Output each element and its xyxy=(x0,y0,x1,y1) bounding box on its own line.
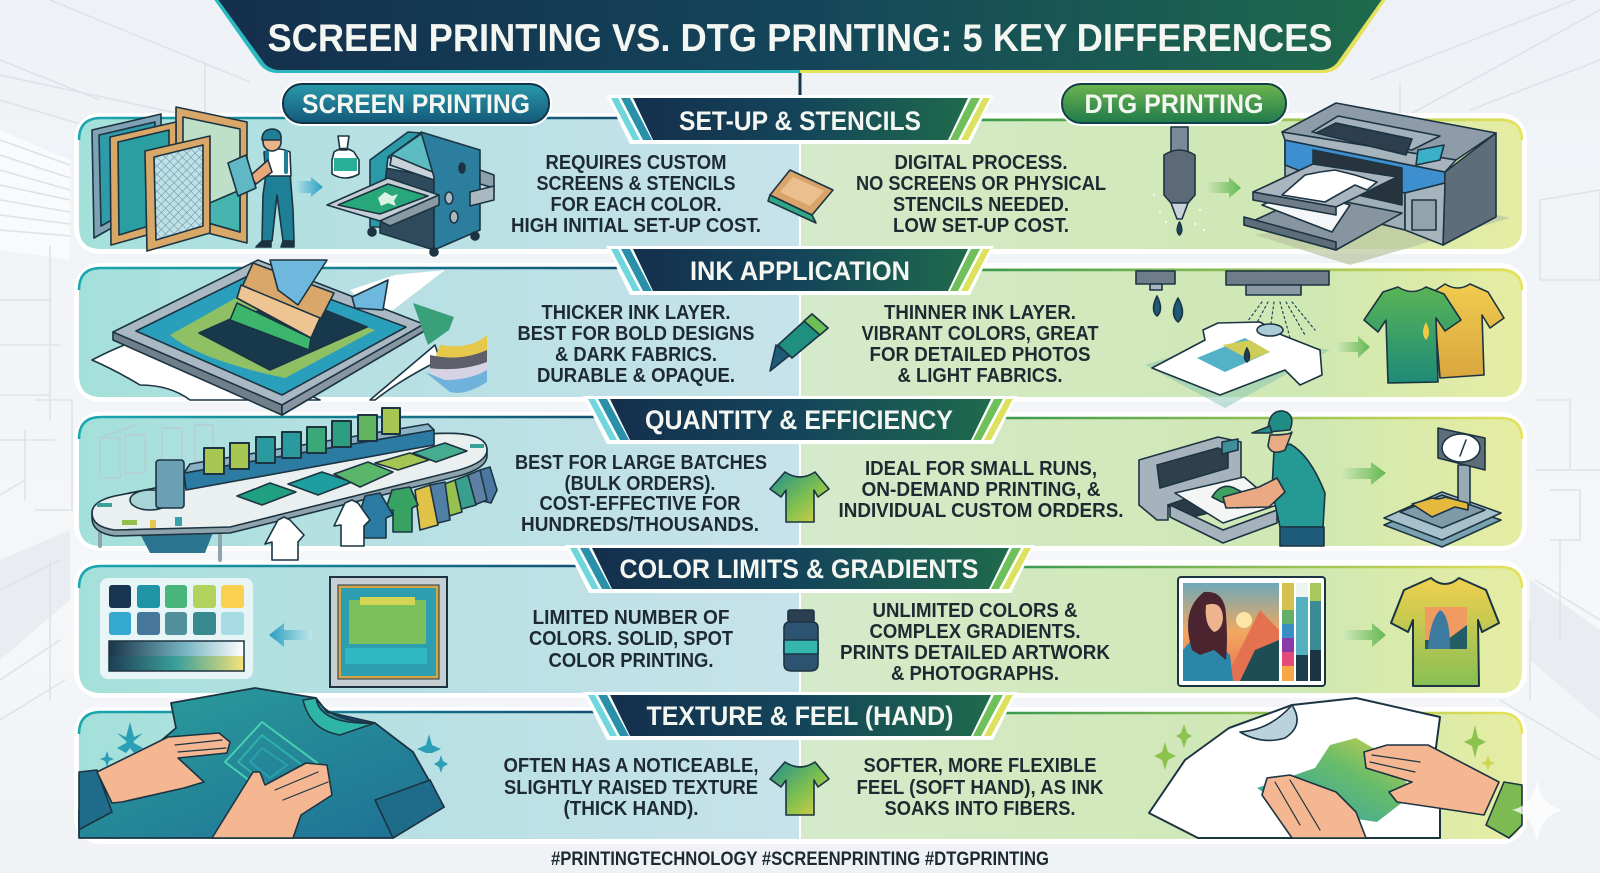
text: dtg texture: SOFTER, MORE FLEXIBLE xyxy=(864,754,1096,777)
text: dtg quantity xyxy=(838,457,1124,522)
text: dtg set-up xyxy=(856,151,1106,237)
gradient strip xyxy=(109,641,244,671)
panel: color limits row xyxy=(74,560,1527,698)
pill: screen printing: SCREEN PRINTING xyxy=(302,89,530,119)
icon: dtg printer xyxy=(1244,103,1510,265)
icon: screen printing press xyxy=(327,132,494,256)
text: dtg ink: THINNER INK LAYER. xyxy=(884,301,1076,324)
text: screen printing ink xyxy=(518,301,754,387)
text: screen printing ink: DURABLE & OPAQUE. xyxy=(537,364,735,387)
text: dtg set-up: NO SCREENS OR PHYSICAL xyxy=(856,172,1106,195)
ribbon: texture and feel xyxy=(583,692,1017,740)
arrow: screens to press xyxy=(294,177,323,197)
pill: screen printing xyxy=(280,81,552,126)
icon: gradient shirt row 5 xyxy=(770,762,829,815)
pill: dtg printing: DTG PRINTING xyxy=(1084,89,1264,119)
text: screen printing ink: THICKER INK LAYER. xyxy=(542,301,730,324)
panel: quantity and efficiency row xyxy=(74,412,1527,551)
ribbon: texture and feel: TEXTURE & FEEL (HAND) xyxy=(646,701,954,731)
icon: weighing scale xyxy=(1384,428,1501,547)
ribbon: color limits and gradients: COLOR LIMITS & GRADIENTS xyxy=(620,554,978,584)
panel: left half row 1 xyxy=(79,118,799,249)
text: screen printing ink: BEST FOR BOLD DESIGNS xyxy=(518,322,754,345)
icon: squeegee xyxy=(768,170,833,223)
icon: white shirt being printed xyxy=(1145,322,1330,408)
text: screen printing quantity: (BULK ORDERS). xyxy=(564,472,716,495)
text: dtg color: COMPLEX GRADIENTS. xyxy=(870,620,1080,643)
panel: ink application row xyxy=(74,263,1527,402)
arrow: screen to palette xyxy=(269,623,312,647)
icon: dtg print nozzle xyxy=(1153,127,1205,235)
text: screen printing ink: & DARK FABRICS. xyxy=(555,343,717,366)
icon: dtg printer with operator xyxy=(1139,437,1277,543)
text: screen printing set-up: FOR EACH COLOR. xyxy=(550,193,722,216)
arrow: printer to scale xyxy=(1341,462,1386,485)
text: dtg ink: FOR DETAILED PHOTOS xyxy=(870,343,1090,366)
icon: framed spot color screen xyxy=(330,577,447,687)
icon: operator at dtg printer xyxy=(1223,411,1325,546)
icon: ink bottle xyxy=(784,610,818,671)
icons: sparkles right xyxy=(1154,724,1495,771)
icon: worker holding a screen xyxy=(228,129,294,247)
ribbon: ink application: INK APPLICATION xyxy=(690,256,910,286)
text: dtg color: & PHOTOGRAPHS. xyxy=(891,662,1059,685)
ribbon: color limits and gradients xyxy=(565,545,1035,593)
text: screen printing texture xyxy=(504,754,758,820)
text: dtg texture: FEEL (SOFT HAND), AS INK xyxy=(856,776,1104,799)
text: dtg texture: SOAKS INTO FIBERS. xyxy=(884,797,1076,820)
text: dtg ink: VIBRANT COLORS, GREAT xyxy=(862,322,1099,345)
text: dtg quantity: ON-DEMAND PRINTING, & xyxy=(862,478,1101,501)
swatches second row xyxy=(109,612,244,635)
text: screen printing color: LIMITED NUMBER OF xyxy=(532,606,730,629)
text: dtg color xyxy=(840,599,1110,685)
decorative sparkle mark xyxy=(1512,780,1562,842)
icon: dtg nozzles and droplets xyxy=(1136,271,1329,345)
icon: ink dropper pen xyxy=(770,314,828,371)
icon: ink bottle xyxy=(332,136,359,178)
portrait figure xyxy=(1183,592,1233,681)
text: screen printing color: COLOR PRINTING. xyxy=(548,649,714,672)
ribbon: quantity and efficiency: QUANTITY & EFFICIENCY xyxy=(645,405,953,435)
footer hashtags: #PRINTINGTECHNOLOGY #SCREENPRINTING #DTGPRINTING xyxy=(551,849,1049,870)
panel: right half row 1 xyxy=(801,118,1522,249)
icon: gradient shirt row 3 xyxy=(770,472,829,522)
text: screen printing quantity: COST-EFFECTIVE FOR xyxy=(540,492,741,515)
ribbon: set-up and stencils xyxy=(606,95,994,144)
ribbon: ink application xyxy=(606,246,994,295)
ribbon: set-up and stencils: SET-UP & STENCILS xyxy=(679,106,921,136)
icon: stack of screens xyxy=(92,107,247,251)
text: screen printing color: COLORS. SOLID, SPOT xyxy=(529,627,733,650)
text: screen printing set-up xyxy=(511,151,761,237)
text: dtg ink: & LIGHT FABRICS. xyxy=(898,364,1062,387)
text: screen printing quantity: BEST FOR LARGE BATCHES xyxy=(515,451,767,474)
title text: SCREEN PRINTING VS. DTG PRINTING: 5 KEY DIFFERENCES xyxy=(268,17,1332,60)
text: screen printing texture: (THICK HAND). xyxy=(564,797,698,820)
icon: swatch card xyxy=(100,578,253,679)
text: screen printing quantity: HUNDREDS/THOUSANDS. xyxy=(521,513,759,536)
sun and landscape xyxy=(1225,610,1279,681)
text: screen printing set-up: HIGH INITIAL SET-UP COST. xyxy=(511,214,761,237)
text: screen printing quantity xyxy=(515,451,767,536)
title banner xyxy=(213,0,1387,73)
pill: dtg printing xyxy=(1059,81,1289,126)
text: dtg quantity: INDIVIDUAL CUSTOM ORDERS. xyxy=(838,499,1124,522)
icon: teal shirt with hands xyxy=(79,688,444,838)
icon: squeegee on screen with ink xyxy=(92,260,445,415)
text: screen printing texture: SLIGHTLY RAISED TEXTURE xyxy=(504,776,758,799)
ribbon: quantity and efficiency xyxy=(583,396,1017,444)
arrow: photo to shirt xyxy=(1343,623,1386,647)
center divider xyxy=(798,72,802,839)
arrow: printed to shirts xyxy=(1336,336,1370,358)
text: dtg set-up: DIGITAL PROCESS. xyxy=(894,151,1068,174)
icon: green and yellow shirts xyxy=(1364,284,1504,383)
text: screen printing set-up: REQUIRES CUSTOM xyxy=(546,151,726,174)
colour bars xyxy=(1282,583,1321,681)
text: dtg color: PRINTS DETAILED ARTWORK xyxy=(840,641,1110,664)
text: screen printing set-up: SCREENS & STENCILS xyxy=(536,172,736,195)
icon: automatic carousel press line xyxy=(92,408,497,560)
panel: set-up and stencils row xyxy=(74,113,1527,254)
text: dtg set-up: LOW SET-UP COST. xyxy=(893,214,1069,237)
icons: sparkles left xyxy=(100,722,448,773)
text: screen printing color xyxy=(529,606,733,672)
text: dtg quantity: IDEAL FOR SMALL RUNS, xyxy=(865,457,1097,480)
icon: white shirt with hands xyxy=(1149,698,1522,838)
panel: texture and feel row xyxy=(74,707,1527,844)
icon: portrait with colour bars xyxy=(1178,577,1325,686)
text: dtg ink xyxy=(862,301,1099,387)
text: dtg texture xyxy=(856,754,1104,820)
text: dtg set-up: STENCILS NEEDED. xyxy=(893,193,1069,216)
icon: stacked ink layers xyxy=(413,303,487,393)
arrow: nozzle to printer xyxy=(1206,177,1241,198)
swatches first row xyxy=(109,585,244,608)
icon: shirt with portrait xyxy=(1391,578,1499,686)
text: screen printing texture: OFTEN HAS A NOTICEABLE, xyxy=(504,754,758,777)
text: dtg color: UNLIMITED COLORS & xyxy=(872,599,1078,622)
